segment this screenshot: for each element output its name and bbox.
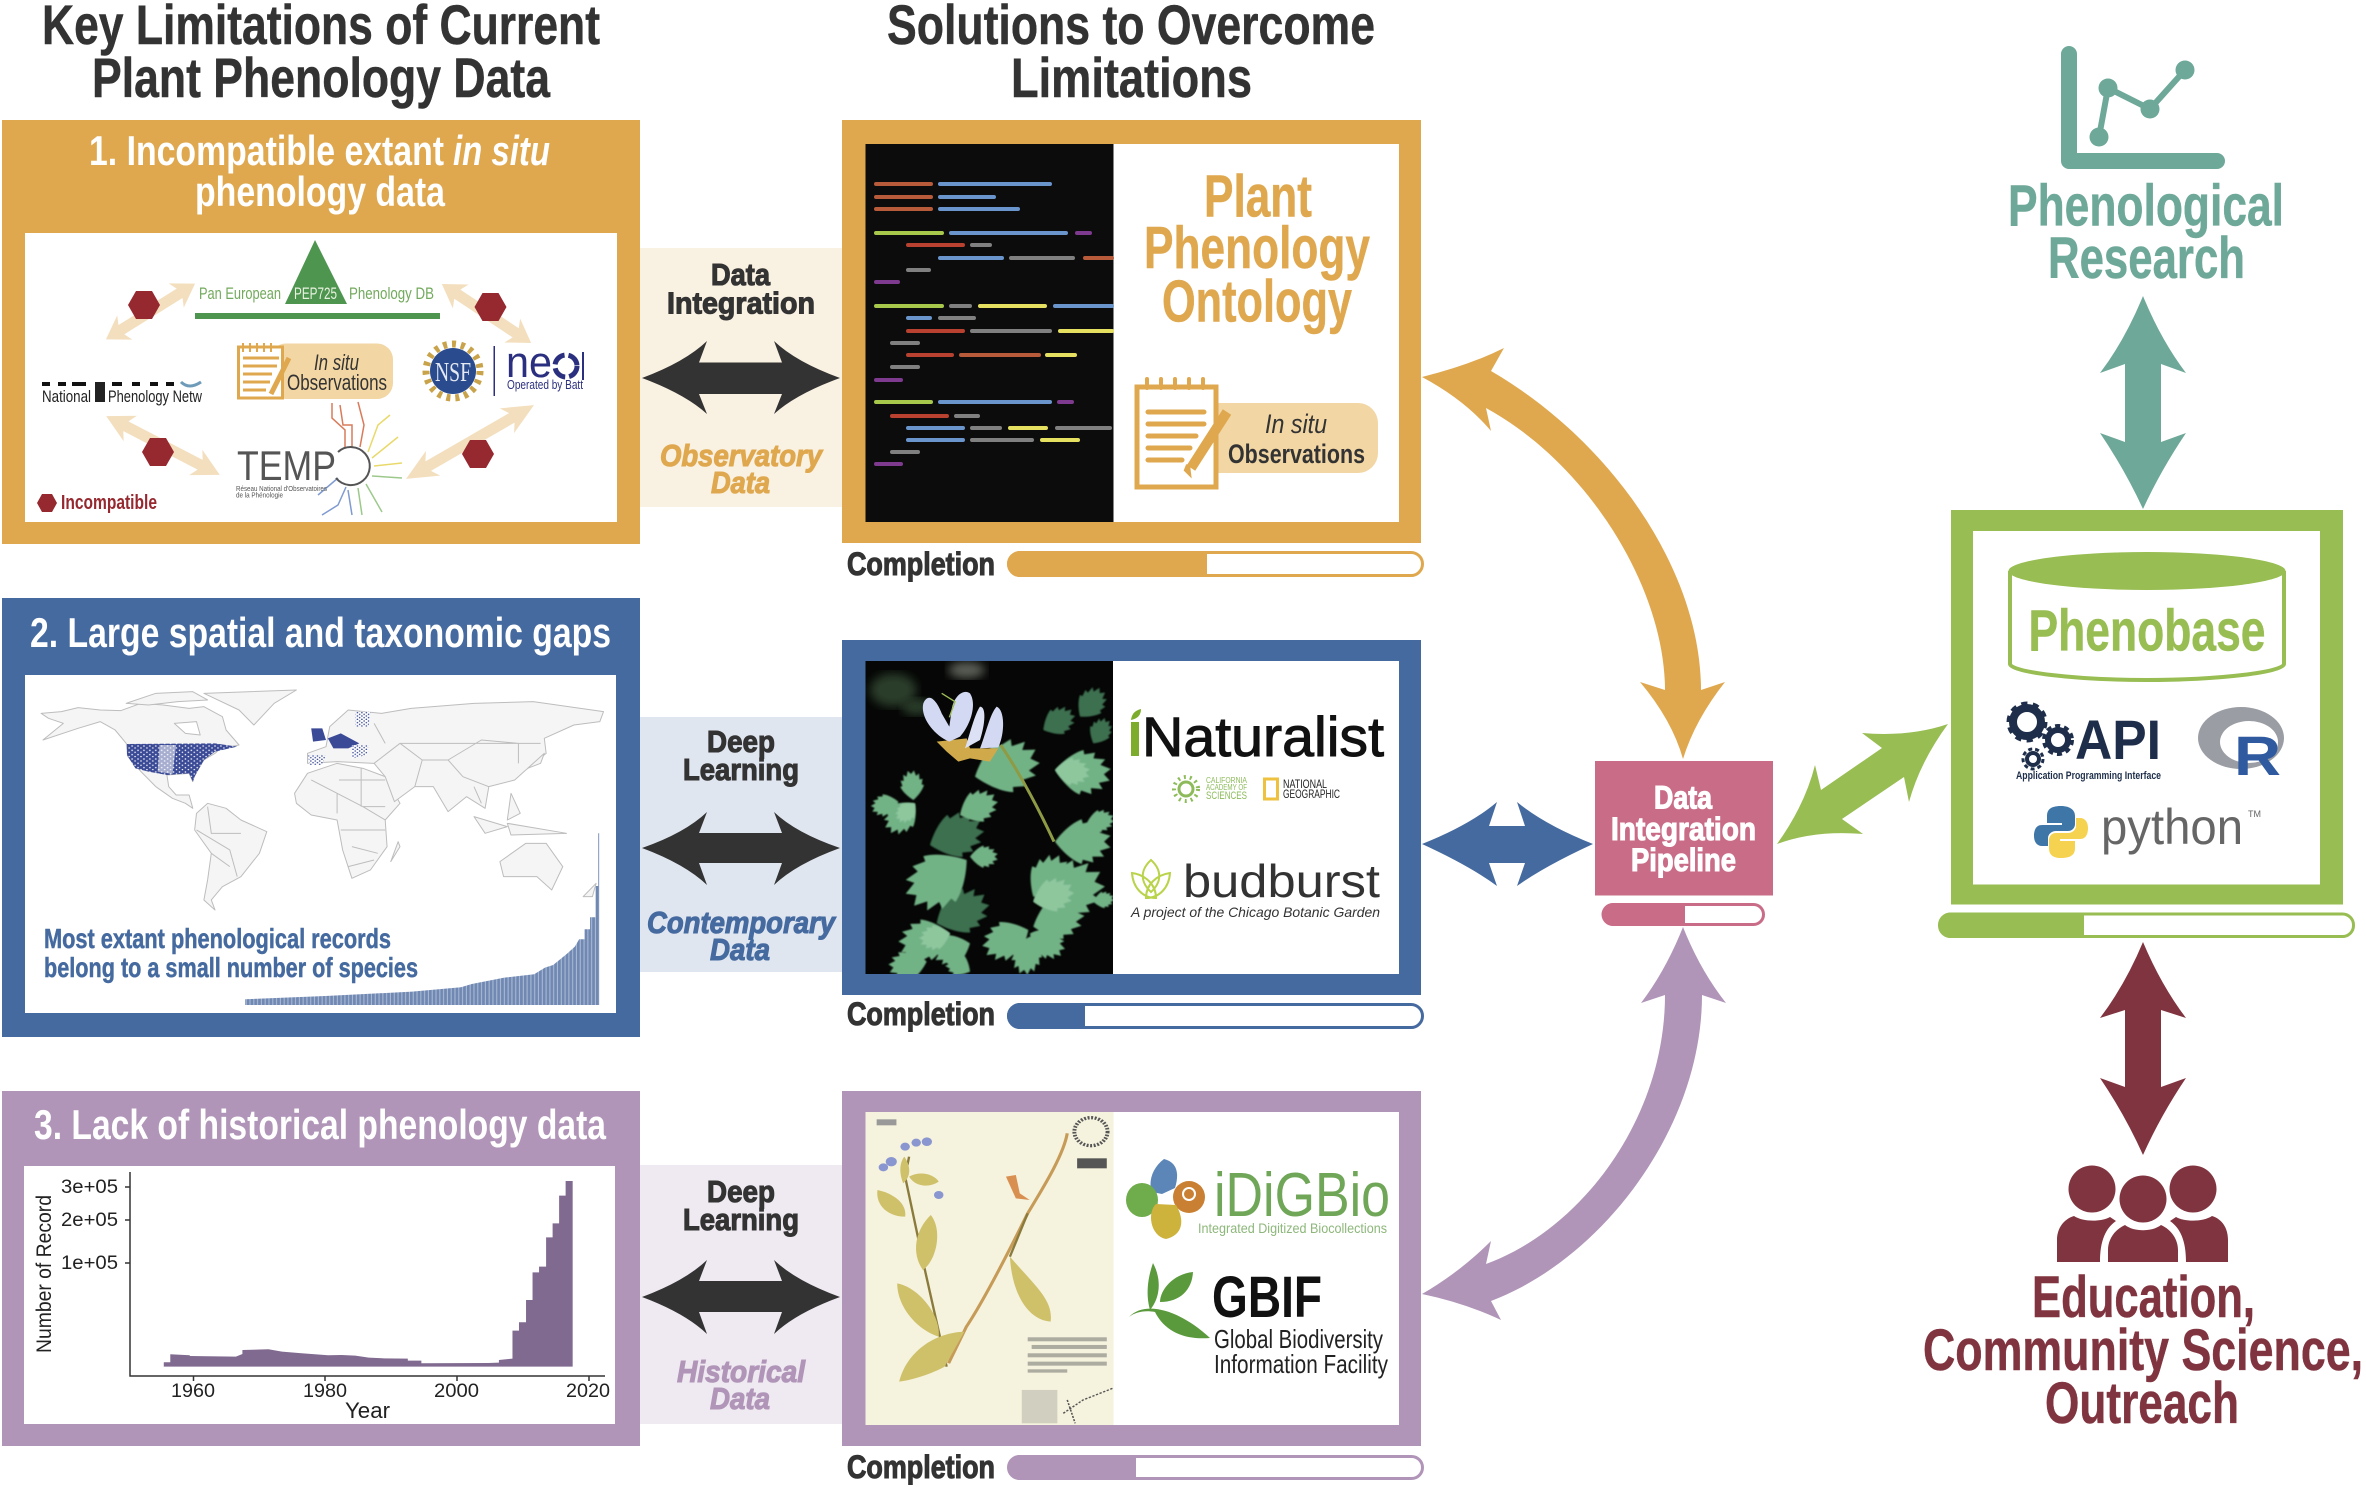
logo: GBIF: Information Facility xyxy=(1214,1349,1388,1379)
world map of records xyxy=(41,690,604,910)
in situ observations badge: Observations xyxy=(287,370,387,395)
logo: California Academy of Sciences: CALIFORNIA xyxy=(1206,776,1248,785)
completion bar 2: Completion xyxy=(847,996,995,1032)
in situ observations badge: In situ xyxy=(314,350,359,375)
logo: National Phenology Network: Phenology Netw xyxy=(108,387,203,406)
panel title 1 xyxy=(89,127,550,215)
panel: limitation 2 spatial and taxonomic gaps xyxy=(2,598,640,1037)
incompatibility arrows xyxy=(98,272,541,491)
in situ observations badge: Observations xyxy=(1228,439,1365,469)
label: deep learning xyxy=(683,724,799,787)
arrow: purple historical to pipeline xyxy=(1422,927,1726,1320)
panel: limitation 1 incompatible data xyxy=(2,120,640,544)
logo: TEMPO: Réseau National d'Observatoires xyxy=(236,486,327,493)
area chart: records by year: Number of Record xyxy=(33,1195,56,1353)
in situ observations badge xyxy=(238,343,393,399)
logo: NEON: Operated by Batt xyxy=(507,377,583,392)
logo: R xyxy=(2198,707,2284,787)
label: phenological research: Research xyxy=(2048,226,2245,291)
heading: solutions xyxy=(887,0,1375,109)
band: data integration xyxy=(640,248,842,507)
herbarium specimen photo xyxy=(866,1112,1114,1425)
label: deep learning xyxy=(683,1174,799,1237)
panel: contemporary data sources xyxy=(842,640,1421,995)
completion bar: phenobase xyxy=(1938,912,2354,938)
label: historical data: Historical xyxy=(677,1354,806,1389)
logo: National Phenology Network xyxy=(42,382,203,406)
logo: National Geographic: NATIONAL xyxy=(1283,777,1327,791)
logo: California Academy of Sciences: SCIENCES xyxy=(1206,790,1247,802)
logo: California Academy of Sciences: ACADEMY OF xyxy=(1206,783,1247,792)
area chart: records by year: 2e+05 xyxy=(61,1210,118,1231)
box: data integration pipeline: Integration xyxy=(1611,811,1756,847)
logo: NEON xyxy=(506,338,584,392)
completion bar 3 xyxy=(847,1449,1422,1485)
in situ observations badge xyxy=(1137,379,1378,487)
label: education community science outreach: Education, xyxy=(2032,1265,2255,1330)
heading: solutions: Limitations xyxy=(1011,46,1252,109)
PEP725 logo: PEP725 xyxy=(294,284,337,303)
label: data integration: Data xyxy=(711,257,771,292)
area chart: records by year: 2020 xyxy=(566,1381,610,1402)
heading: key limitations: Plant Phenology Data xyxy=(92,46,551,109)
title: plant phenology ontology xyxy=(1144,164,1370,334)
PEP725 logo: Phenology DB xyxy=(349,284,434,303)
logo: API xyxy=(2009,704,2161,782)
label: historical data: Data xyxy=(710,1381,770,1416)
arrow: limitation 3 to solution 3 xyxy=(642,1260,840,1334)
area chart: records by year: 1980 xyxy=(303,1381,347,1402)
species bar chart xyxy=(245,833,599,1005)
area chart: records by year: 1e+05 xyxy=(61,1253,118,1274)
flower photo xyxy=(866,661,1117,983)
label: data integration xyxy=(667,257,815,320)
logo: iDigBio xyxy=(1126,1159,1390,1239)
logo: python: TM xyxy=(2248,809,2261,819)
icon: line chart xyxy=(2069,54,2217,161)
logo: iDigBio: Integrated Digitized Biocollections xyxy=(1198,1220,1387,1236)
code screenshot xyxy=(866,144,1114,522)
label: observatory data xyxy=(660,438,824,500)
label: historical data xyxy=(677,1354,806,1416)
box: data integration pipeline: Data xyxy=(1654,780,1712,816)
logo: NSF xyxy=(426,344,495,398)
area chart: records by year xyxy=(33,1172,610,1423)
title: plant phenology ontology: Phenology xyxy=(1144,215,1370,281)
arrow: green pipeline to phenobase xyxy=(1777,724,1948,844)
panel title 3: 3. Lack of historical phenology data xyxy=(34,1101,607,1148)
database cylinder xyxy=(2008,552,2286,680)
completion bar 1: Completion xyxy=(847,546,995,582)
logo: iDigBio: iDiGBio xyxy=(1214,1161,1390,1230)
incompatible hexagons xyxy=(128,291,506,468)
label: contemporary data: Contemporary xyxy=(647,905,837,940)
area chart: records by year: 2000 xyxy=(434,1381,479,1402)
label: education community science outreach xyxy=(1923,1265,2363,1436)
logo: NSF: NSF xyxy=(435,357,471,387)
arrow: limitation 1 to solution 1 xyxy=(642,341,840,414)
label: education community science outreach: Outreach xyxy=(2045,1371,2239,1436)
PEP725 logo xyxy=(195,240,440,319)
panel: limitation 3 historical data xyxy=(2,1091,640,1446)
completion bar 3: Completion xyxy=(847,1449,995,1485)
band: deep learning contemporary xyxy=(640,717,842,972)
database cylinder: Phenobase xyxy=(2028,598,2266,664)
panel title 2: 2. Large spatial and taxonomic gaps xyxy=(30,609,611,656)
arrow: blue contemporary to pipeline xyxy=(1422,802,1593,886)
logo: California Academy of Sciences xyxy=(1174,776,1248,802)
logo: NEON: ne xyxy=(506,338,552,387)
title: plant phenology ontology: Plant xyxy=(1204,164,1312,230)
in situ observations badge: In situ xyxy=(1265,409,1327,439)
label: contemporary data xyxy=(647,905,837,967)
legend: incompatible: Incompatible xyxy=(61,492,157,514)
logo: GBIF xyxy=(1129,1263,1388,1379)
logo: python xyxy=(2034,799,2261,858)
panel: phenobase xyxy=(1951,510,2343,904)
completion bar 2 xyxy=(847,996,1422,1032)
label: deep learning: Learning xyxy=(683,1202,799,1237)
logo: TEMPO xyxy=(236,402,402,515)
label: deep learning: Deep xyxy=(707,724,775,759)
area chart: records by year: Year xyxy=(345,1398,390,1423)
arrow: limitation 2 to solution 2 xyxy=(642,812,840,885)
heading: key limitations xyxy=(42,0,600,109)
arrow: research to phenobase xyxy=(2100,296,2186,509)
logo: python: python xyxy=(2101,799,2243,855)
label: deep learning: Deep xyxy=(707,1174,775,1209)
panel title 1: in situ xyxy=(453,127,550,174)
band: deep learning historical xyxy=(640,1165,842,1424)
logo: TEMPO: TEMP xyxy=(237,442,336,489)
caption: records: belong to a small number of species xyxy=(44,952,418,983)
panel: plant phenology ontology xyxy=(842,120,1421,543)
logo: GBIF: GBIF xyxy=(1212,1265,1322,1330)
arrow: orange ontology to pipeline xyxy=(1422,348,1725,759)
caption: records: Most extant phenological records xyxy=(44,923,391,954)
area chart: records by year: 3e+05 xyxy=(61,1177,118,1198)
area chart: records by year: 1960 xyxy=(171,1381,215,1402)
logo: budburst: budburst xyxy=(1183,855,1380,907)
panel: historical data sources xyxy=(842,1091,1421,1446)
box: data integration pipeline xyxy=(1595,761,1773,896)
title: plant phenology ontology: Ontology xyxy=(1162,268,1352,334)
arrow: phenobase to education xyxy=(2100,942,2186,1155)
icon: people xyxy=(2057,1166,2228,1262)
legend: incompatible xyxy=(37,492,157,514)
label: observatory data: Data xyxy=(711,465,770,500)
completion bar 1 xyxy=(847,546,1422,582)
label: observatory data: Observatory xyxy=(660,438,824,473)
logo: National Phenology Network: National xyxy=(42,387,91,406)
label: contemporary data: Data xyxy=(710,932,770,967)
logo: GBIF: Global Biodiversity xyxy=(1214,1324,1383,1354)
logo: iNaturalist: Naturalist xyxy=(1142,705,1384,768)
label: phenological research: Phenological xyxy=(2008,174,2284,238)
label: data integration: Integration xyxy=(667,286,815,320)
logo: R: R xyxy=(2234,724,2281,787)
logo: National Geographic xyxy=(1264,777,1340,801)
logo: National Geographic: GEOGRAPHIC xyxy=(1283,787,1340,801)
box: data integration pipeline: Pipeline xyxy=(1631,842,1736,878)
completion bar: pipeline xyxy=(1602,903,1764,926)
panel title 1: 1. Incompatible extant xyxy=(89,127,444,174)
PEP725 logo: Pan European xyxy=(199,284,281,303)
caption: records xyxy=(44,923,418,983)
logo: budburst: A project of the Chicago Botanic Garden xyxy=(1130,904,1380,920)
logo: budburst xyxy=(1130,855,1380,920)
logo: TEMPO: de la Phénologie xyxy=(236,492,283,500)
label: deep learning: Learning xyxy=(683,752,799,787)
logo: API: API xyxy=(2075,708,2161,771)
logo: API: Application Programming Interface xyxy=(2016,770,2161,782)
label: phenological research xyxy=(2008,174,2284,291)
panel title 1: phenology data xyxy=(195,168,446,215)
